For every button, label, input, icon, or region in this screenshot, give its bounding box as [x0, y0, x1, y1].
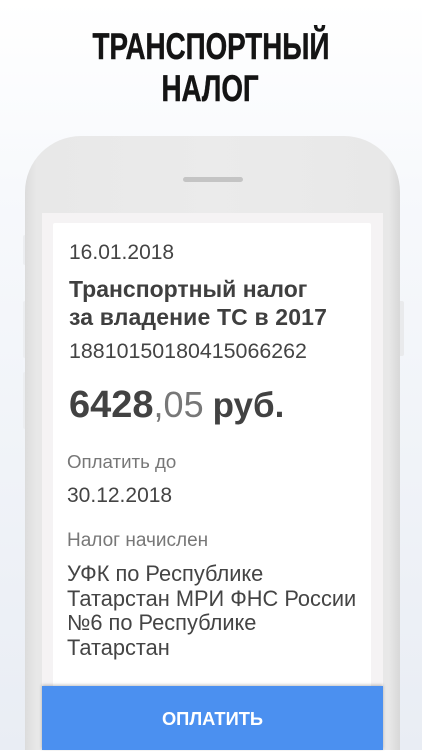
tax heading: [69, 276, 327, 330]
side button: right: [400, 301, 404, 356]
due label: Оплатить до: [67, 451, 176, 472]
title: [92, 25, 329, 109]
tax heading: Транспортный налог: [69, 276, 307, 302]
phone mockup: [23, 136, 404, 750]
title: НАЛОГ: [162, 68, 259, 109]
charged by: [67, 561, 356, 660]
charged by: №6 по Республике: [67, 610, 256, 635]
side button: left middle: [23, 301, 26, 358]
title: ТРАНСПОРТНЫЙ: [93, 26, 329, 67]
screen: [42, 213, 383, 750]
card: [53, 223, 371, 693]
document number: 18810150180415066262: [69, 339, 307, 363]
amount: 6428,05 руб.: [69, 384, 284, 426]
speaker: [183, 177, 243, 182]
tax heading: за владение ТС в 2017: [69, 304, 327, 330]
phone body: [25, 136, 400, 750]
date: 16.01.2018: [69, 241, 174, 264]
charged by: Татарстан МРИ ФНС России: [67, 586, 356, 611]
charged by: УФК по Республике: [67, 561, 263, 586]
pay button: ОПЛАТИТЬ: [162, 708, 263, 729]
side button: left bottom: [23, 372, 26, 429]
pay button: [42, 686, 383, 750]
side button: left top: [23, 235, 26, 265]
due date: 30.12.2018: [67, 484, 172, 507]
charged label: Налог начислен: [67, 530, 208, 551]
charged by: Татарстан: [67, 635, 170, 660]
